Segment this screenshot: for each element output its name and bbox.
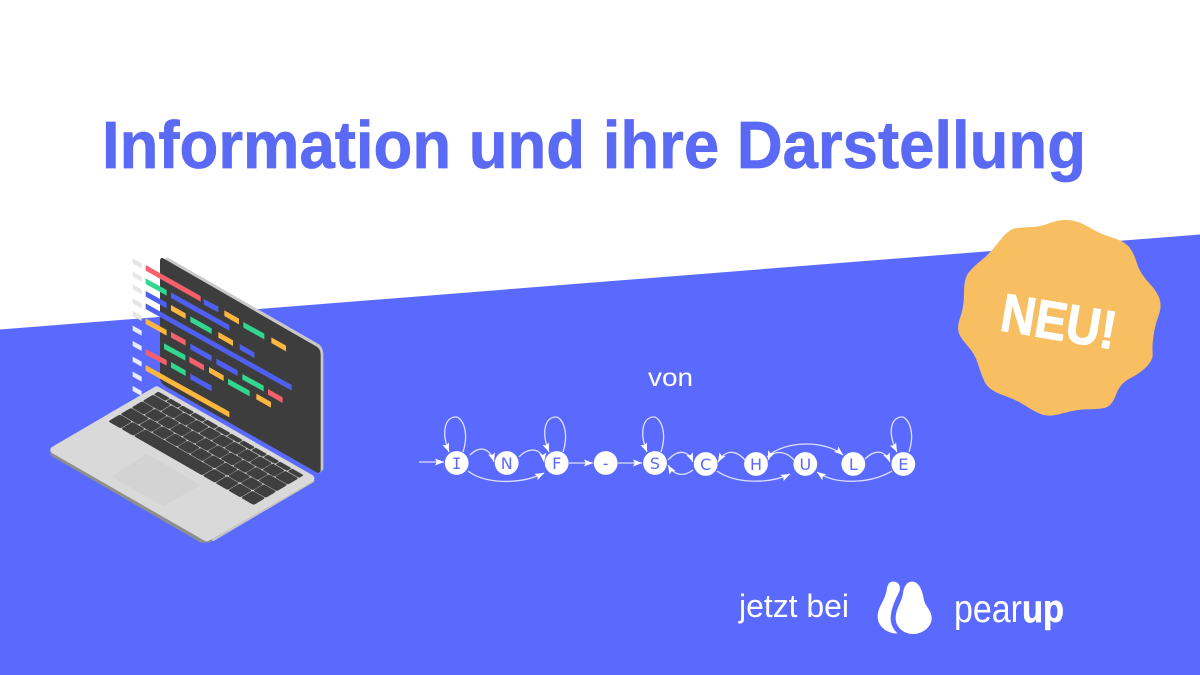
trackpad bbox=[113, 455, 198, 505]
state letters: L bbox=[849, 455, 858, 474]
icon: pearup logo mark bbox=[878, 582, 932, 634]
state letters: N bbox=[501, 454, 513, 473]
laptop base bbox=[54, 390, 313, 539]
state letters: E bbox=[898, 455, 908, 474]
text: jetzt bei: jetzt bei bbox=[738, 588, 849, 624]
automaton diagram: INF-SCHULE bbox=[419, 417, 915, 481]
state letters: I bbox=[452, 454, 462, 473]
state letters bbox=[452, 454, 908, 474]
pearup wordmark: up bbox=[1022, 588, 1064, 631]
transition arrows bbox=[419, 417, 912, 481]
pearup wordmark: pear bbox=[954, 588, 1022, 631]
state nodes bbox=[445, 451, 915, 476]
state letters: S bbox=[650, 454, 660, 473]
state letters: F bbox=[552, 454, 561, 473]
state letters: C bbox=[700, 455, 711, 474]
wavy orange seal bbox=[958, 220, 1161, 416]
laptop screen bbox=[160, 257, 323, 473]
title: Information und ihre Darstellung bbox=[102, 108, 1086, 183]
state letters: U bbox=[799, 455, 811, 474]
state letters: - bbox=[603, 454, 609, 473]
state letters: H bbox=[750, 455, 762, 474]
keyboard bbox=[108, 392, 304, 505]
text: von: von bbox=[648, 364, 693, 392]
ghost code dashes bbox=[133, 258, 142, 396]
badge: NEU! bbox=[958, 220, 1161, 416]
blue diagonal background bbox=[0, 234, 1200, 675]
badge text: NEU! bbox=[997, 283, 1121, 361]
code bars bbox=[146, 265, 292, 417]
icon: isometric laptop with code bbox=[54, 257, 323, 539]
